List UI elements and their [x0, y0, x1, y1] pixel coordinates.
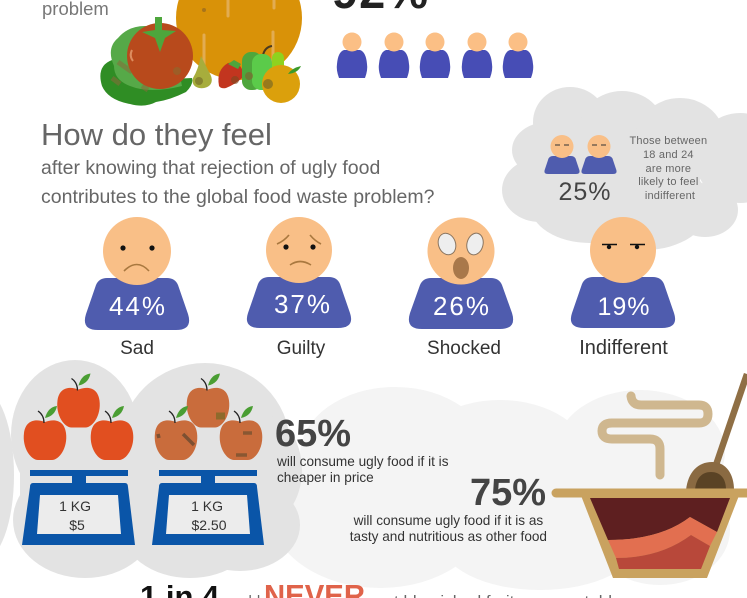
emotion: guilty 37%	[247, 217, 351, 359]
emotion: sad 44%	[85, 217, 189, 359]
cloud: pale background right	[270, 387, 730, 590]
scale body	[152, 470, 264, 545]
scale: 1 KG $2.50	[152, 470, 264, 545]
scale label: 1 KG	[59, 498, 91, 514]
guilty face	[266, 217, 332, 283]
soup red layer	[616, 535, 710, 569]
scale window	[37, 495, 121, 534]
subheading: contributes to the global food waste problem?	[41, 186, 435, 208]
callout: 25% aged 18 to 24	[544, 135, 711, 206]
bowl rim	[556, 488, 747, 498]
callout text: likely to feel	[638, 176, 699, 188]
scale body	[22, 470, 135, 545]
cloud: grey background left	[0, 360, 302, 578]
statistic: 25%: 25%	[558, 178, 612, 206]
shocked face	[428, 218, 494, 284]
person 2	[379, 32, 409, 78]
statistic: 75% tasty	[350, 472, 547, 544]
apple top	[57, 374, 100, 428]
subheading: after knowing that rejection of ugly food	[41, 157, 380, 179]
description: tasty and nutritious as other food	[350, 529, 547, 544]
blemished apples group	[155, 374, 262, 460]
strawberry	[218, 60, 243, 88]
person 5	[503, 32, 533, 78]
illustration: steaming bowl with ladle	[556, 374, 747, 578]
body	[247, 277, 351, 328]
bell pepper	[242, 46, 284, 90]
description: will consume ugly food if it is as	[353, 513, 543, 528]
tomato	[127, 17, 193, 89]
statistic: 1 in 4 never eat	[140, 578, 630, 598]
label: Guilty	[277, 338, 326, 359]
value: 26%	[433, 291, 491, 321]
steam	[602, 396, 708, 475]
scale label: $2.50	[191, 517, 227, 533]
value: 37%	[274, 289, 332, 319]
description: will consume ugly food if it is	[276, 454, 449, 469]
scale label: 1 KG	[191, 498, 223, 514]
callout text: 18 and 24	[643, 149, 694, 161]
label: Indifferent	[579, 337, 668, 359]
sad face	[103, 217, 171, 285]
apple left	[24, 406, 66, 460]
apple left	[155, 406, 197, 460]
emotion: shocked 26%	[409, 218, 513, 359]
person icons row	[337, 32, 533, 78]
callout text: Those between	[629, 135, 707, 147]
emotion: indifferent 19%	[571, 217, 675, 359]
heading: How do they feel: How do they feel	[41, 117, 272, 152]
apple right	[91, 406, 133, 460]
small indifferent person left	[544, 135, 580, 174]
illustration: blemished produce	[100, 0, 302, 106]
label: Shocked	[427, 338, 501, 359]
apple top	[187, 374, 229, 428]
soup orange layer	[608, 517, 717, 558]
person 1	[337, 32, 367, 78]
pumpkin	[176, 0, 302, 80]
value: 65%	[275, 413, 351, 455]
fresh apples group	[24, 374, 133, 460]
value: 44%	[109, 291, 167, 321]
callout text: indifferent	[645, 190, 695, 202]
scale: 1 KG $5	[22, 470, 135, 545]
small indifferent person right	[581, 135, 617, 174]
apple right	[220, 406, 262, 460]
soup dark layer	[590, 498, 730, 540]
description: cheaper in price	[277, 470, 374, 485]
ladle	[686, 374, 747, 490]
callout text: are more	[646, 163, 691, 175]
cloud: indifferent callout background	[502, 87, 747, 250]
bowl	[580, 493, 740, 578]
body	[409, 278, 513, 329]
scale window	[166, 495, 250, 534]
lettuce	[100, 26, 192, 106]
label: Sad	[120, 338, 154, 359]
statistic: 65% cheaper	[275, 413, 452, 485]
orange	[262, 65, 301, 103]
pear	[193, 56, 212, 88]
body	[571, 277, 675, 328]
value: 75%	[470, 472, 546, 514]
scale label: $5	[69, 517, 85, 533]
person 3	[420, 32, 450, 78]
indifferent face	[590, 217, 656, 283]
person 4	[462, 32, 492, 78]
value: 19%	[597, 293, 651, 321]
body	[85, 278, 189, 330]
